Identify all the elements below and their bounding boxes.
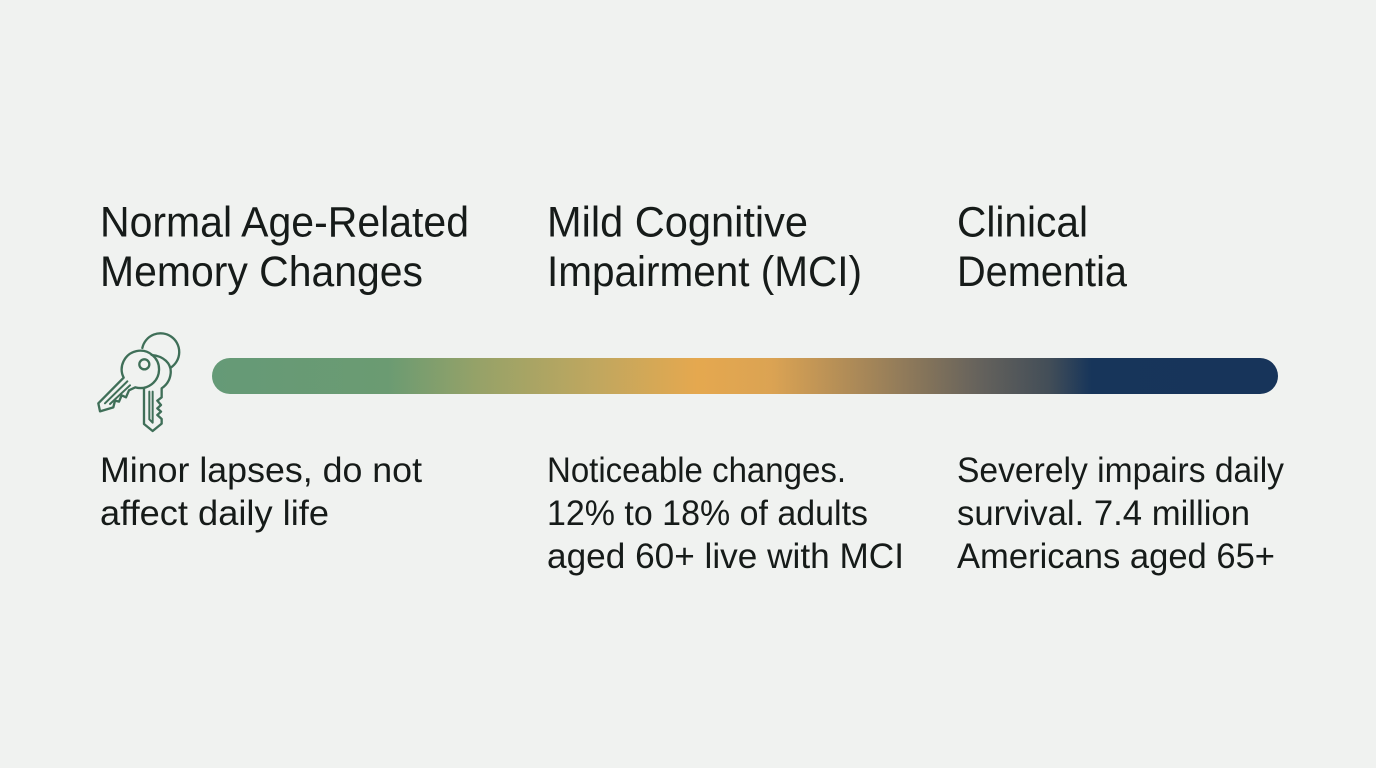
heading: mild cognitive impairment: Impairment (MCI): [547, 248, 862, 296]
heading: clinical dementia: Dementia: [957, 248, 1127, 296]
heading: normal age-related memory changes: Memory Changes: [100, 248, 423, 296]
description: normal changes: Minor lapses, do not: [100, 451, 422, 490]
description: MCI: Noticeable changes.: [547, 451, 846, 490]
description: normal changes: [100, 451, 422, 533]
description: MCI: [547, 451, 904, 576]
description: dementia: [957, 451, 1284, 576]
description: MCI: 12% to 18% of adults: [547, 494, 868, 533]
heading: clinical dementia: [957, 198, 1127, 296]
heading: clinical dementia: Clinical: [957, 198, 1088, 246]
description: dementia: survival. 7.4 million: [957, 494, 1250, 533]
heading: normal age-related memory changes: [100, 198, 469, 296]
gradient progression bar: [212, 358, 1278, 394]
description: normal changes: affect daily life: [100, 494, 329, 533]
description: MCI: aged 60+ live with MCI: [547, 537, 904, 576]
heading: normal age-related memory changes: Normal Age-Related: [100, 198, 469, 246]
icon: keys: [98, 333, 179, 431]
heading: mild cognitive impairment: [547, 198, 862, 296]
description: dementia: Americans aged 65+: [957, 537, 1275, 576]
heading: mild cognitive impairment: Mild Cognitive: [547, 198, 808, 246]
description: dementia: Severely impairs daily: [957, 451, 1284, 490]
